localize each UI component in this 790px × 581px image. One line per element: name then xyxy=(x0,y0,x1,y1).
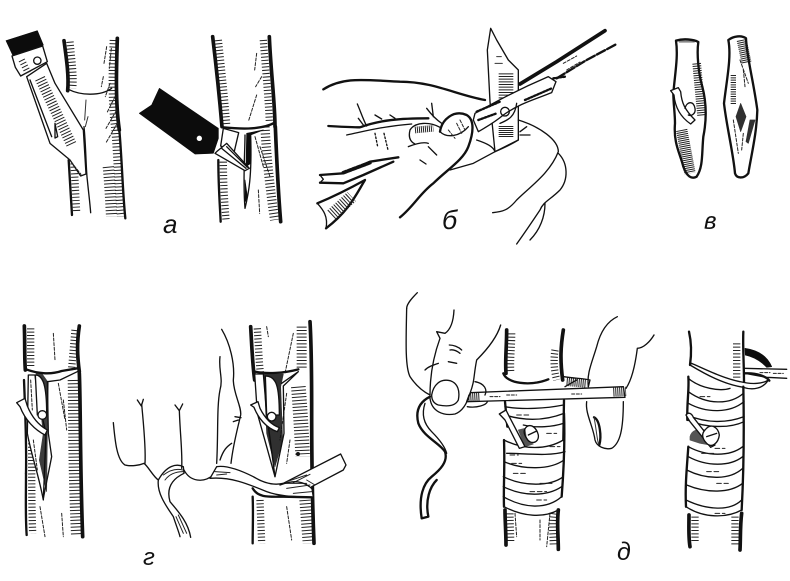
palm and lower fingers xyxy=(450,120,566,244)
hanging raffia end xyxy=(417,397,447,518)
fingers, right side of stem xyxy=(586,317,654,449)
knife blade xyxy=(487,28,518,152)
label d: д xyxy=(617,538,631,566)
panel d: binding the stem xyxy=(406,293,787,566)
panel v: cut buds (shields) xyxy=(671,36,757,235)
panel g: bud inserted and tied xyxy=(17,322,346,571)
raffia strip, taut across xyxy=(467,377,626,402)
label g: г xyxy=(143,544,155,571)
stem with T-cut, right xyxy=(213,37,281,222)
budding knife pushing into bark xyxy=(6,31,86,176)
hand with thumb, left xyxy=(406,293,501,415)
shield, cut side view xyxy=(724,36,757,177)
raffia loop behind right stem xyxy=(744,348,787,381)
stem with inserted bud, right xyxy=(251,322,314,543)
panel a: bark cutting steps xyxy=(6,31,281,239)
label a: а xyxy=(163,209,177,239)
fingers holding the raffia xyxy=(113,329,241,480)
shoot xyxy=(473,31,617,132)
label v: в xyxy=(704,208,717,235)
stem with T-cut, left xyxy=(64,38,125,218)
lower shoot piece and cut end xyxy=(317,157,398,228)
wrapped stem, middle xyxy=(503,330,565,549)
label b: б xyxy=(442,205,458,235)
raffia strip wrapped around stem xyxy=(158,465,191,537)
bud on middle stem xyxy=(499,410,538,448)
wrapped stem, right xyxy=(686,332,768,550)
stem with inserted bud, left xyxy=(17,326,83,537)
budding knife, black handle xyxy=(139,88,249,171)
panel b: cutting the bud from a shoot xyxy=(317,28,617,244)
upper fingers of the hand xyxy=(323,80,485,150)
shield with bud, side view xyxy=(671,39,706,178)
raffia strip over right stem xyxy=(210,454,346,497)
thumb xyxy=(400,113,480,217)
